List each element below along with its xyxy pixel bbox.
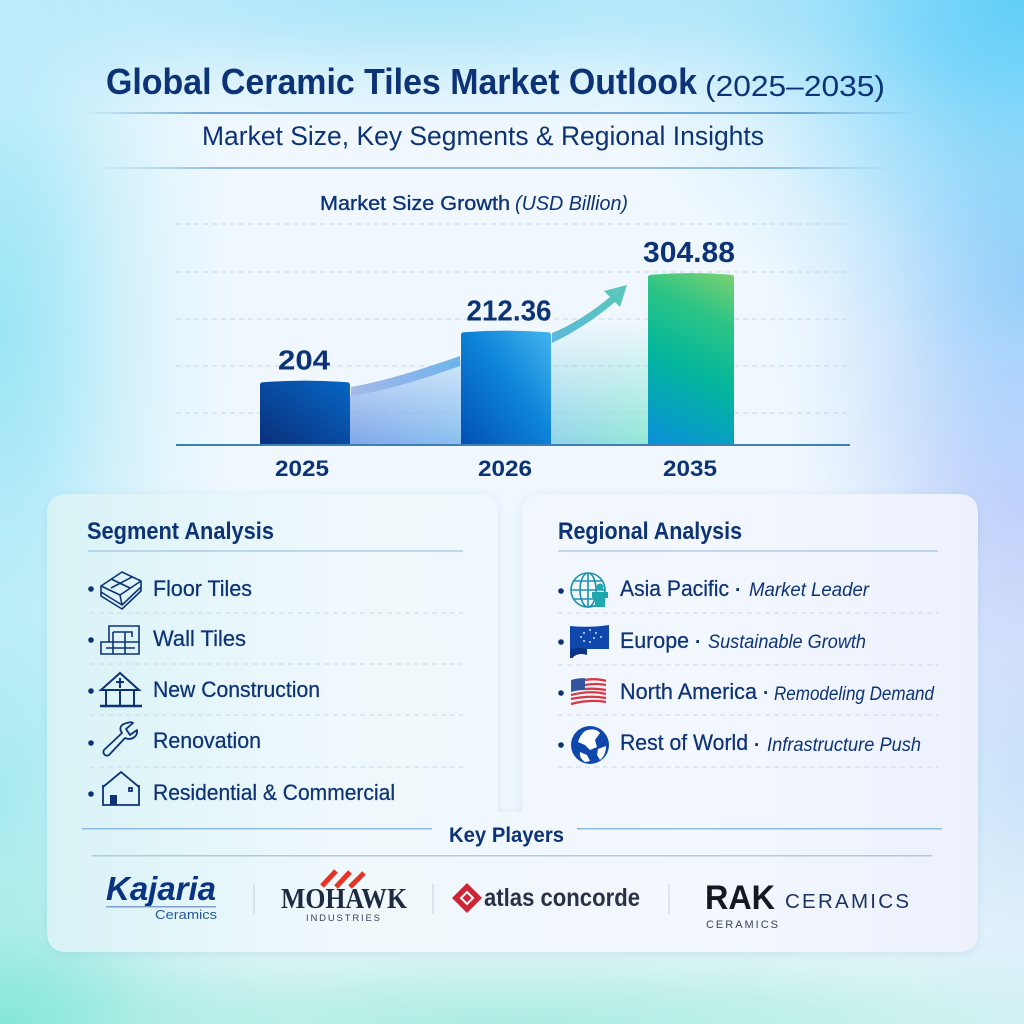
title: Global Ceramic Tiles Market Outlook	[106, 61, 698, 102]
bar 2025: 204	[278, 344, 330, 376]
logo: rak ceramics: CERAMICS	[785, 890, 909, 913]
logo: mohawk: INDUSTRIES	[306, 913, 380, 924]
item: europe: Sustainable Growth	[708, 631, 866, 653]
item: rest of world: Rest of World	[620, 730, 748, 755]
chart title	[320, 193, 628, 215]
item: wall tiles	[88, 626, 246, 654]
item: floor tiles	[88, 572, 252, 609]
item: north america: Remodeling Demand	[774, 683, 935, 705]
heading: key players: Key Players	[449, 823, 564, 847]
item: renovation	[88, 722, 261, 756]
logo: mohawk	[281, 871, 407, 924]
logo: atlas concorde: atlas concorde	[484, 884, 640, 912]
item: asia pacific: ·	[735, 580, 741, 601]
growth arrow	[351, 285, 627, 396]
logo: rak ceramics: CERAMICS	[706, 919, 778, 931]
chart title: Market Size Growth	[320, 193, 510, 215]
title: (2025–2035)	[705, 71, 885, 103]
item: asia pacific: Asia Pacific	[620, 576, 729, 601]
item: north america: ·	[763, 683, 769, 704]
item: rest of world: Infrastructure Push	[767, 734, 921, 756]
item: residential and commercial	[88, 772, 395, 805]
subtitle: Market Size, Key Segments & Regional Insights	[202, 121, 764, 151]
logo: kajaria: Ceramics	[155, 907, 218, 922]
item: rest of world: ·	[754, 735, 760, 756]
item: north america	[558, 678, 935, 707]
item: north america: North America	[620, 679, 758, 704]
item: asia pacific	[558, 573, 870, 607]
bar 2026: 2026	[478, 456, 532, 481]
item: europe: ·	[695, 632, 701, 653]
item: new construction	[88, 673, 320, 706]
panel: regional analysis	[558, 518, 938, 767]
item: wall tiles: Wall Tiles	[153, 626, 246, 651]
chart: market size growth	[176, 193, 850, 481]
bar 2035: 304.88	[643, 237, 735, 269]
item: asia pacific: Market Leader	[749, 579, 870, 601]
bar 2035: 2035	[663, 456, 717, 481]
logo: rak ceramics: RAK	[705, 879, 775, 917]
bar 2025: 2025	[275, 456, 329, 481]
item: rest of world	[558, 726, 921, 764]
heading: regional analysis: Regional Analysis	[558, 518, 742, 545]
axis	[176, 444, 850, 446]
area under trend	[350, 330, 648, 444]
logo: rak ceramics	[705, 879, 909, 931]
panels background	[47, 494, 978, 952]
panel: segment analysis	[87, 518, 463, 805]
item: residential and commercial: Residential & Commercial	[153, 780, 395, 805]
item: new construction: New Construction	[153, 677, 320, 702]
item: floor tiles: Floor Tiles	[153, 576, 252, 601]
logo: mohawk: MOHAWK	[281, 884, 407, 915]
item: renovation: Renovation	[153, 728, 261, 753]
bar 2026	[461, 296, 552, 481]
item: europe	[558, 625, 866, 658]
chart title: (USD Billion)	[515, 193, 628, 215]
bar 2026: 212.36	[466, 296, 552, 328]
bar 2035	[643, 237, 735, 481]
bar 2025	[260, 344, 350, 481]
panel: key players	[82, 823, 942, 931]
heading: segment analysis: Segment Analysis	[87, 518, 274, 545]
logo: kajaria: Kajaria	[106, 870, 216, 907]
item: europe: Europe	[620, 628, 689, 653]
